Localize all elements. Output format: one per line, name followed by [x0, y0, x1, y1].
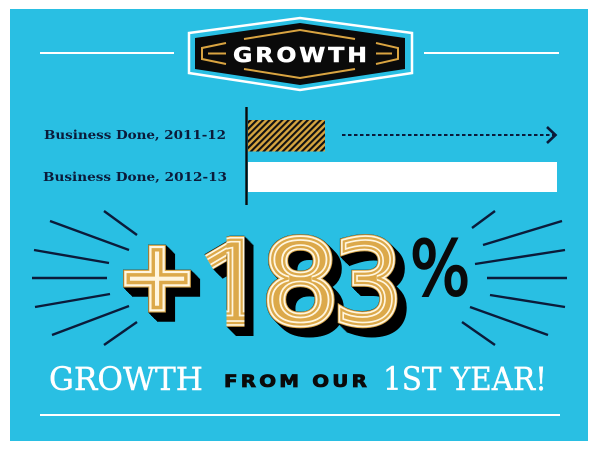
- rays left: [32, 211, 137, 345]
- plus sign: +: [118, 222, 196, 330]
- tagline: growth: GROWTH: [49, 360, 203, 398]
- header rule right: [424, 52, 559, 54]
- tagline: from our: FROM OUR: [224, 373, 367, 392]
- percent sign: %: [410, 226, 470, 313]
- digit 3: 3: [333, 218, 403, 351]
- digit 1 flag stroke: [209, 245, 238, 262]
- digit 1: [226, 236, 254, 336]
- digit 8: 8: [262, 217, 339, 350]
- digit 1: 1: [198, 217, 271, 350]
- footer rule: [40, 414, 560, 416]
- badge: growth title: [189, 18, 412, 90]
- bar label 2011-12: Business Done, 2011-12: [44, 128, 226, 142]
- arrow: [342, 127, 556, 143]
- digit 8: 8: [262, 217, 339, 350]
- bar 2011-12 hatched: [248, 120, 325, 152]
- rays right: [462, 211, 567, 345]
- tagline: 1st year: 1ST YEAR!: [383, 360, 547, 398]
- big number +183: [123, 234, 407, 338]
- digit 8: 8: [262, 217, 339, 350]
- badge: growth title: GROWTH: [233, 43, 367, 68]
- plus sign: +: [118, 222, 196, 330]
- digit 1: 1: [198, 217, 271, 350]
- bar label 2012-13: Business Done, 2012-13: [43, 170, 227, 184]
- digit 8: 8: [262, 217, 339, 350]
- bar 2012-13 white: [248, 162, 557, 192]
- plus sign: +: [118, 222, 196, 330]
- digit 3: 3: [333, 218, 403, 351]
- digit 3: 3: [333, 218, 403, 351]
- plus sign: +: [118, 222, 196, 330]
- digit 1: 1: [198, 217, 271, 350]
- chart axis: [245, 107, 248, 205]
- header rule left: [40, 52, 174, 54]
- digit 1: 1: [198, 217, 271, 350]
- digit 3: 3: [333, 218, 403, 351]
